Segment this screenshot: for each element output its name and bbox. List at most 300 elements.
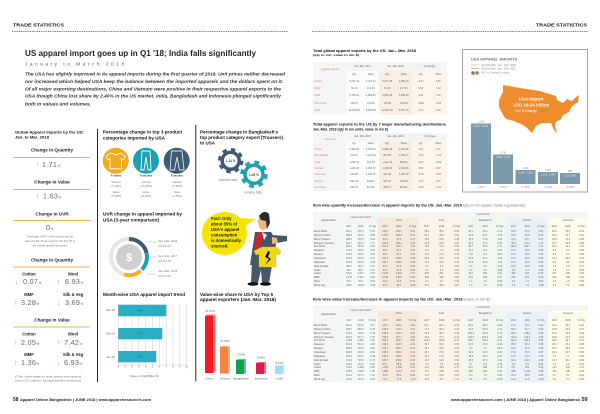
table: item-wise value: -4.34 (454, 328, 459, 331)
table: item-wise quantity: 183.9 (396, 234, 402, 237)
table: item-wise quantity: 1.5 (483, 284, 487, 287)
table: exports by manufacturing destination: Indonesia (314, 173, 326, 176)
donut labels: Jan.-Mar. 2016 (158, 239, 178, 243)
table: item-wise value: -6.19 (578, 374, 584, 377)
table: item-wise quantity: 8.2 (425, 249, 428, 252)
table: item-wise quantity: -3.73 (578, 257, 584, 260)
table: item-wise quantity: 88.7 (468, 245, 473, 248)
table: item-wise value: % Chg (453, 319, 460, 322)
table: item-wise quantity: 86.3 (483, 245, 487, 248)
table: item-wise value: 4,867 (346, 370, 352, 373)
table: item-wise quantity: 86.5 (397, 238, 401, 241)
table: item-wise value: 23.7 (565, 351, 570, 354)
table: item-wise value: 45.7 (439, 378, 444, 381)
bar chart: Jan-18 (106, 355, 115, 359)
table: item-wise value: Men's Shirts (314, 324, 327, 327)
table: item-wise value: 2.1 (469, 363, 472, 366)
change in value by fibre: ↑ (14, 360, 18, 367)
table: item-wise quantity: -4.67 (454, 284, 459, 287)
table: item-wise value: 1.90 (370, 339, 375, 342)
table: total global apparel imports: 148.27 (350, 102, 358, 105)
table: item-wise value: 3.60 (410, 339, 415, 342)
table: item-wise quantity: 19.8 (525, 265, 530, 268)
table: total global apparel imports: 3.28 (418, 94, 423, 97)
table: item-wise value: 5.35 (539, 339, 543, 342)
table: item-wise value: 34.6 (468, 343, 473, 346)
table: item-wise quantity: 5.12 (539, 234, 543, 237)
table: item-wise value: 2017 (468, 319, 473, 322)
table: item-wise quantity: % Chg (537, 225, 545, 228)
table: item-wise value: 312.4 (510, 339, 516, 342)
table: item-wise quantity: -3.26 (454, 242, 459, 245)
change in value by fibre (14, 318, 84, 367)
table: item-wise quantity: % Chg (369, 225, 376, 228)
table: item-wise quantity: 56.4 (347, 280, 351, 283)
table: item-wise quantity: 16.3 (424, 238, 429, 241)
callout: fact: sourced. (211, 244, 228, 248)
table: item-wise value: 13.8 (439, 359, 444, 362)
table: item-wise value: -6.45 (538, 378, 544, 381)
table: item-wise quantity: 98.2 (358, 269, 363, 272)
table: item-wise value: 14.7 (424, 355, 429, 358)
table: total global apparel imports: 7.42 (436, 87, 441, 90)
table: item-wise quantity: 279.6 (358, 238, 364, 241)
table: item-wise value: 71.4 (424, 328, 429, 331)
table: item-wise value: -3.11 (497, 359, 502, 362)
table: item-wise quantity: Knit Shirts (314, 245, 325, 248)
table: item-wise quantity: -7.69 (454, 280, 459, 283)
table: item-wise quantity: 8.79 (410, 280, 415, 283)
table: item-wise value: 684 (469, 370, 473, 373)
table: item-wise quantity: 96.7 (347, 269, 351, 272)
table: total global apparel imports: 4,932.69 (399, 94, 409, 97)
table: item-wise value: -4.57 (578, 347, 584, 350)
table: item-wise quantity: 2.6 (469, 269, 472, 272)
table: item-wise quantity: 4.32 (410, 245, 415, 248)
table: item-wise quantity: Wool (314, 280, 319, 283)
cartoon: businessman holding a shirt (248, 212, 287, 286)
table: item-wise quantity: 5.35 (370, 230, 375, 233)
panel: USA apparel imports map and bars (462, 50, 588, 192)
table: item-wise value: 986 (511, 370, 515, 373)
map of the USA: YoY % Change 1.63% (515, 109, 547, 113)
table: item-wise quantity: 2.98 (370, 234, 375, 237)
table: item-wise quantity: 2,206 (396, 272, 402, 275)
table: item-wise quantity: 11.8 (511, 261, 516, 264)
table: item-wise quantity: 88.5 (383, 253, 387, 256)
table: item-wise quantity: 2.40 (410, 269, 415, 272)
table: item-wise value: 57.4 (552, 332, 557, 335)
table: exports by manufacturing destination: Honduras (314, 186, 326, 189)
table: item-wise quantity: 894 (425, 272, 429, 275)
table: item-wise value: 58.6 (511, 328, 516, 331)
bars by fibre: 1,204 (523, 167, 529, 170)
table: item-wise value: Socks (314, 363, 321, 366)
table: total global apparel imports: MMF (314, 94, 320, 97)
table: item-wise value: 174.2 (396, 328, 402, 331)
table: item-wise value: 6.08 (539, 347, 543, 350)
table: item-wise value: 2017 (382, 319, 388, 322)
table: item-wise quantity: -2.45 (370, 261, 375, 264)
table: item-wise value: -3.74 (578, 339, 584, 342)
bar chart: (Value in USD Billion $) (129, 374, 159, 378)
table: item-wise quantity: 5.35 (539, 272, 543, 275)
intro text (25, 72, 285, 106)
table: exports by manufacturing destination: 259.17 (383, 186, 391, 189)
table: item-wise value: 10.9 (439, 374, 444, 377)
table: item-wise value: 206 (566, 366, 570, 369)
change in value (34, 180, 70, 200)
table: item-wise quantity: 2018 (565, 225, 570, 228)
table: item-wise quantity: -2.74 (497, 230, 502, 233)
table: item-wise value: 62.8 (383, 374, 387, 377)
table: item-wise quantity: -5.32 (578, 276, 584, 279)
table: item-wise quantity: China (396, 219, 402, 222)
table: item-wise value: 2017 (552, 319, 557, 322)
table heading: exports by destination: Total apparel exports to the US by 7 major manufacturing destinations (313, 122, 446, 126)
table: item-wise value: 3.14 (410, 351, 415, 354)
table: item-wise quantity: MMF (314, 276, 319, 279)
table: item-wise value: % Chg (369, 319, 376, 322)
title: US apparel import goes up in Q1 '18; India falls significantly (25, 49, 257, 58)
table: item-wise quantity: 143.8 (346, 253, 352, 256)
table: item-wise value: 40.8 (565, 324, 570, 327)
table: item-wise value: 2018 (358, 319, 363, 322)
table: item-wise value: 28.7 (439, 332, 444, 335)
panel: top 3 product categories (103, 130, 190, 198)
category values: (-10.38%) (140, 184, 152, 188)
table: item-wise value: 71.8 (511, 351, 516, 354)
table: item-wise value: 184.3 (382, 324, 388, 327)
bars by fibre: 982 (568, 170, 573, 173)
change in UVR: (Average UVR in the review period (27, 234, 73, 238)
bars by fibre: 2,748 (500, 152, 507, 154)
table: item-wise quantity: 134.7 (382, 261, 388, 264)
table: item-wise value: 146.5 (382, 332, 388, 335)
donut chart: $ (126, 252, 132, 264)
bars by fibre: 7.42% (499, 185, 507, 189)
change in quantity by fibre: Wool (68, 272, 78, 276)
table: item-wise quantity: 1.8 (469, 253, 472, 256)
bar chart: 9 (179, 364, 181, 368)
table: item-wise value: Knit Shirts (314, 339, 325, 342)
bar chart: 1 (124, 364, 126, 368)
table: item-wise quantity: Vietnam (523, 219, 532, 222)
bar chart: 5.50 (137, 355, 143, 359)
change in quantity by fibre: 6.93% (65, 277, 84, 286)
table: item-wise value: 4.76 (539, 355, 543, 358)
table: item-wise quantity: Cotton (314, 272, 321, 275)
table: item-wise value: 31.8 (552, 328, 557, 331)
table: total global apparel imports: -6.93 (435, 102, 441, 105)
panel heading: Jan. to Mar. 2018 (15, 136, 49, 140)
table: item-wise quantity: 2018 (396, 225, 402, 228)
table: item-wise quantity: 4.15 (539, 242, 543, 245)
table: item-wise value: 37.4 (483, 359, 487, 362)
table: item-wise quantity: -2.71 (497, 245, 502, 248)
table: item-wise value: 62.7 (424, 324, 429, 327)
gear labels (219, 178, 262, 194)
table: item-wise value: -2.39 (370, 355, 375, 358)
table: item-wise quantity: 1.01 (410, 272, 415, 275)
table: total global apparel imports: 227.94 (400, 87, 408, 90)
category values: Volume (172, 180, 182, 184)
table: exports by manufacturing destination: 1,040.57 (366, 173, 376, 176)
table: item-wise quantity: 142.8 (358, 284, 364, 287)
bars by fibre: 5,532 (478, 120, 485, 124)
table: item-wise quantity: % Chg (453, 225, 460, 228)
table: item-wise value: 9.7 (553, 374, 556, 377)
table: item-wise value: 4.9 (526, 363, 529, 366)
table: item-wise value: 571 (511, 366, 515, 369)
table: item-wise value: Vietnam (523, 312, 532, 315)
table: item-wise quantity: 96.1 (383, 249, 387, 252)
change in quantity by fibre: Change in Quantity (31, 258, 73, 262)
table: item-wise quantity: 62.1 (468, 230, 473, 233)
table: item-wise value: 3,214 (346, 366, 352, 369)
table: item-wise quantity: 30.6 (439, 284, 444, 287)
table: total global apparel imports: Total (314, 109, 320, 112)
table: exports by manufacturing destination: 1,248.63 (382, 167, 392, 170)
table: item-wise quantity: % Chg (496, 225, 503, 228)
table: total global apparel imports: 12,781.60 (382, 109, 393, 112)
table: item-wise quantity: 18.6 (511, 265, 516, 268)
bar chart: 8 (172, 364, 174, 368)
table: item-wise quantity: 1.9 (553, 280, 556, 283)
panel title and legend: USA APPAREL IMPORTS (471, 56, 517, 62)
table: item-wise quantity: Dresses (314, 253, 323, 256)
table: item-wise value: 312 (552, 370, 556, 373)
table: item-wise value: 3.15 (410, 347, 415, 350)
table: item-wise value: 3.1 (469, 378, 472, 381)
table: total global apparel imports: 196.96 (400, 102, 408, 105)
table: item-wise quantity: 5.28 (539, 249, 543, 252)
table: exports by manufacturing destination: Qty (385, 142, 389, 145)
table: item-wise value: 54.3 (511, 347, 516, 350)
table: item-wise quantity: 452.1 (346, 230, 352, 233)
table: item-wise quantity: 19.8 (397, 280, 401, 283)
table: total global apparel imports: Apparel Imports (321, 68, 339, 71)
table: item-wise value: 1,042 (524, 370, 530, 373)
change in value by fibre: 7.42% (64, 338, 83, 347)
table: item-wise value: 3,280 (358, 366, 364, 369)
table: item-wise value: 2017 (424, 319, 429, 322)
table: item-wise quantity: -3.85 (497, 269, 502, 272)
donut labels: US $ 3.74 (158, 244, 171, 248)
table: item-wise quantity: 84.2 (383, 238, 387, 241)
table: item-wise quantity: -4.84 (454, 234, 459, 237)
table: item-wise quantity: 2018 (358, 225, 363, 228)
table: item-wise value: 248.3 (468, 332, 474, 335)
table: item-wise value: 5.35 (539, 332, 543, 335)
table: exports by manufacturing destination: 811.65 (400, 180, 407, 183)
table: item-wise quantity: 45.6 (439, 230, 444, 233)
category values: Volume (141, 180, 151, 184)
change in quantity (31, 148, 73, 169)
table: item-wise quantity: 3,592 (396, 276, 402, 279)
table: item-wise value: 1,846 (346, 339, 352, 342)
table: item-wise value: 92.7 (565, 339, 570, 342)
table: item-wise value: -2.02 (410, 343, 415, 346)
change in value by fibre: 2.05% (21, 338, 40, 347)
table: item-wise value: 214 (552, 366, 556, 369)
table: item-wise value: Underwear (314, 351, 326, 354)
table: item-wise value: 1.55 (370, 336, 375, 339)
table: item-wise value: Indonesia (563, 312, 573, 315)
table: total global apparel imports: 6,740.21 (349, 94, 359, 97)
table: item-wise value: 18.8 (565, 347, 570, 350)
table: exports by manufacturing destination: 814.27 (350, 154, 358, 157)
icon: slim trousers (133, 148, 159, 174)
table: total global apparel imports: 6.93 (418, 87, 423, 90)
bars by fibre: 1,187 / 1,204 (519, 172, 533, 174)
table: item-wise quantity: 161.7 (358, 265, 364, 268)
table: item-wise value: 42.6 (424, 347, 429, 350)
table: item-wise value: 71.2 (511, 324, 516, 327)
table: item-wise value: 612.4 (346, 324, 352, 327)
table: item-wise quantity: 44.1 (565, 245, 570, 248)
table: item-wise quantity: 158.3 (346, 265, 352, 268)
table: item-wise quantity: 824 (511, 276, 515, 279)
table: exports by manufacturing destination: -4.16 (418, 173, 424, 176)
table: item-wise value: 219.4 (396, 347, 402, 350)
table: item-wise quantity: Men's Shirts (314, 230, 327, 233)
table: item-wise value: 1,947 (396, 370, 402, 373)
table: total global apparel imports: 5,617.18 (382, 80, 392, 83)
table: item-wise quantity: 10.9 (539, 280, 543, 283)
table: item-wise quantity: 4.19 (410, 234, 415, 237)
table: item-wise quantity: -8.04 (578, 230, 584, 233)
table: item-wise quantity: 2.15 (370, 265, 375, 268)
category labels: Trousers (140, 174, 152, 178)
table: item-wise quantity: 24.1 (552, 257, 557, 260)
category values: (-1.61%) (172, 194, 182, 198)
table: item-wise quantity: 74.2 (439, 245, 444, 248)
table: item-wise value: 29.8 (424, 332, 429, 335)
table: total global apparel imports: 142.80 (383, 102, 391, 105)
change in value by fibre: 6.93% (64, 358, 83, 367)
3D bar chart: Bangladesh (233, 376, 249, 380)
table: item-wise value: 548.7 (346, 328, 352, 331)
change in value by fibre: Cotton (22, 332, 36, 336)
table: exports by manufacturing destination: 418.66 (350, 173, 358, 176)
table: item-wise quantity: 64.7 (511, 257, 516, 260)
table: item-wise value: -3.61 (578, 336, 584, 339)
table: total global apparel imports: % Change (424, 64, 435, 68)
donut labels (146, 239, 178, 278)
table: item-wise quantity: 34.9 (511, 230, 516, 233)
panel: month-wise trend (103, 292, 189, 378)
3D bar chart: Indonesia (255, 376, 268, 380)
table: item-wise quantity: 12.5 (525, 261, 530, 264)
bars by fibre: 1,010 / 982 (564, 174, 577, 178)
table: item-wise quantity: 43.1 (483, 234, 487, 237)
bar chart: 10 (185, 364, 189, 368)
table: item-wise value: Sweaters (314, 343, 324, 346)
table: item-wise quantity: -3.79 (497, 234, 502, 237)
table: item-wise value: -4.49 (578, 370, 584, 373)
table: item-wise quantity: 1.8 (566, 280, 569, 283)
table: item-wise value: 4.2 (469, 347, 472, 350)
table: item-wise quantity: 258 (566, 272, 570, 275)
table: item-wise value: 2018 (525, 319, 530, 322)
table: item-wise quantity: 22.4 (552, 234, 557, 237)
table: item-wise quantity: 2018 (439, 225, 444, 228)
table: item-wise value: 30.6 (565, 328, 570, 331)
footnote: from CTC values, trip and further analysed) (15, 378, 81, 382)
callout: fact (202, 212, 256, 255)
table: item-wise quantity: Sweaters (314, 249, 324, 252)
table: item-wise value: Nightwear (314, 355, 325, 358)
table: item-wise quantity: -4.79 (454, 253, 459, 256)
table: item-wise quantity: 13.9 (439, 253, 444, 256)
table: item-wise quantity: 5.70 (539, 276, 543, 279)
table: item-wise value: -4.05 (578, 355, 584, 358)
table: item-wise quantity: 236 (483, 276, 487, 279)
change in quantity: Change in Quantity (31, 148, 73, 152)
table: total global apparel imports: Qty (352, 72, 356, 76)
table: item-wise value: 668 (483, 370, 487, 373)
table: item-wise quantity: 24.6 (511, 249, 516, 252)
table: total global apparel imports: 8,637.75 (399, 109, 409, 112)
table: item-wise quantity: 5,617 (358, 272, 364, 275)
table: item-wise quantity: 37.2 (525, 230, 530, 233)
table: item-wise quantity: Imports from World (351, 216, 371, 219)
table: item-wise value: 1,058 (396, 366, 402, 369)
table: item-wise quantity: 19.9 (565, 242, 570, 245)
table: item-wise quantity: Bangladesh (479, 219, 491, 222)
table: exports by manufacturing destination: 5,418.62 (349, 148, 359, 151)
table: item-wise value: 324.7 (382, 359, 388, 362)
table: item-wise value: 2.0 (483, 363, 487, 366)
table: total global apparel imports: Value (368, 72, 374, 76)
table: item-wise value: 724.6 (346, 332, 352, 335)
bar chart: 3 (138, 364, 140, 368)
table: exports by manufacturing destination: 587.10 (383, 180, 391, 183)
table: item-wise quantity: 263 (552, 276, 556, 279)
table: item-wise quantity: 62.4 (383, 269, 387, 272)
table: item-wise value: -4.15 (454, 324, 459, 327)
table: item-wise quantity: 2017 (552, 225, 557, 228)
table: total global apparel imports: 8,504.59 (366, 109, 376, 112)
table: item-wise value: 128.4 (346, 363, 352, 366)
table: item-wise value: 7.42 (370, 374, 375, 377)
table: item-wise quantity: 9.4 (566, 249, 569, 252)
table: item-wise value: 68.3 (439, 328, 444, 331)
table: item-wise quantity: -2.53 (370, 249, 375, 252)
table: item-wise value: 88.4 (468, 324, 473, 327)
table: exports by manufacturing destination: Qty (352, 142, 356, 145)
table: exports by manufacturing destination: 2,460.72 (366, 167, 376, 170)
table: item-wise quantity: 249 (566, 276, 570, 279)
table: item-wise value: 724.9 (358, 359, 364, 362)
table: item-wise value: 13.2 (525, 355, 530, 358)
category values: Value (174, 190, 181, 194)
table: item-wise quantity: 86.9 (383, 265, 387, 268)
table: item-wise quantity: 6,961 (358, 276, 364, 279)
table: exports by manufacturing destination: 2.37 (436, 167, 441, 170)
table: item-wise quantity: 58.9 (468, 257, 473, 260)
table: item-wise quantity: 21.6 (468, 261, 473, 264)
bar chart: 4 (145, 364, 147, 368)
table: item-wise value: 33.5 (483, 343, 487, 346)
table: item-wise value: 18.3 (483, 355, 487, 358)
table: item-wise quantity: 41.2 (511, 238, 516, 241)
table: item-wise quantity: Nightwear (314, 261, 325, 264)
change in quantity by fibre: 3.69% (65, 298, 84, 307)
table: item-wise value: 624.3 (346, 351, 352, 354)
table: item-wise value: 4.95 (539, 343, 543, 346)
